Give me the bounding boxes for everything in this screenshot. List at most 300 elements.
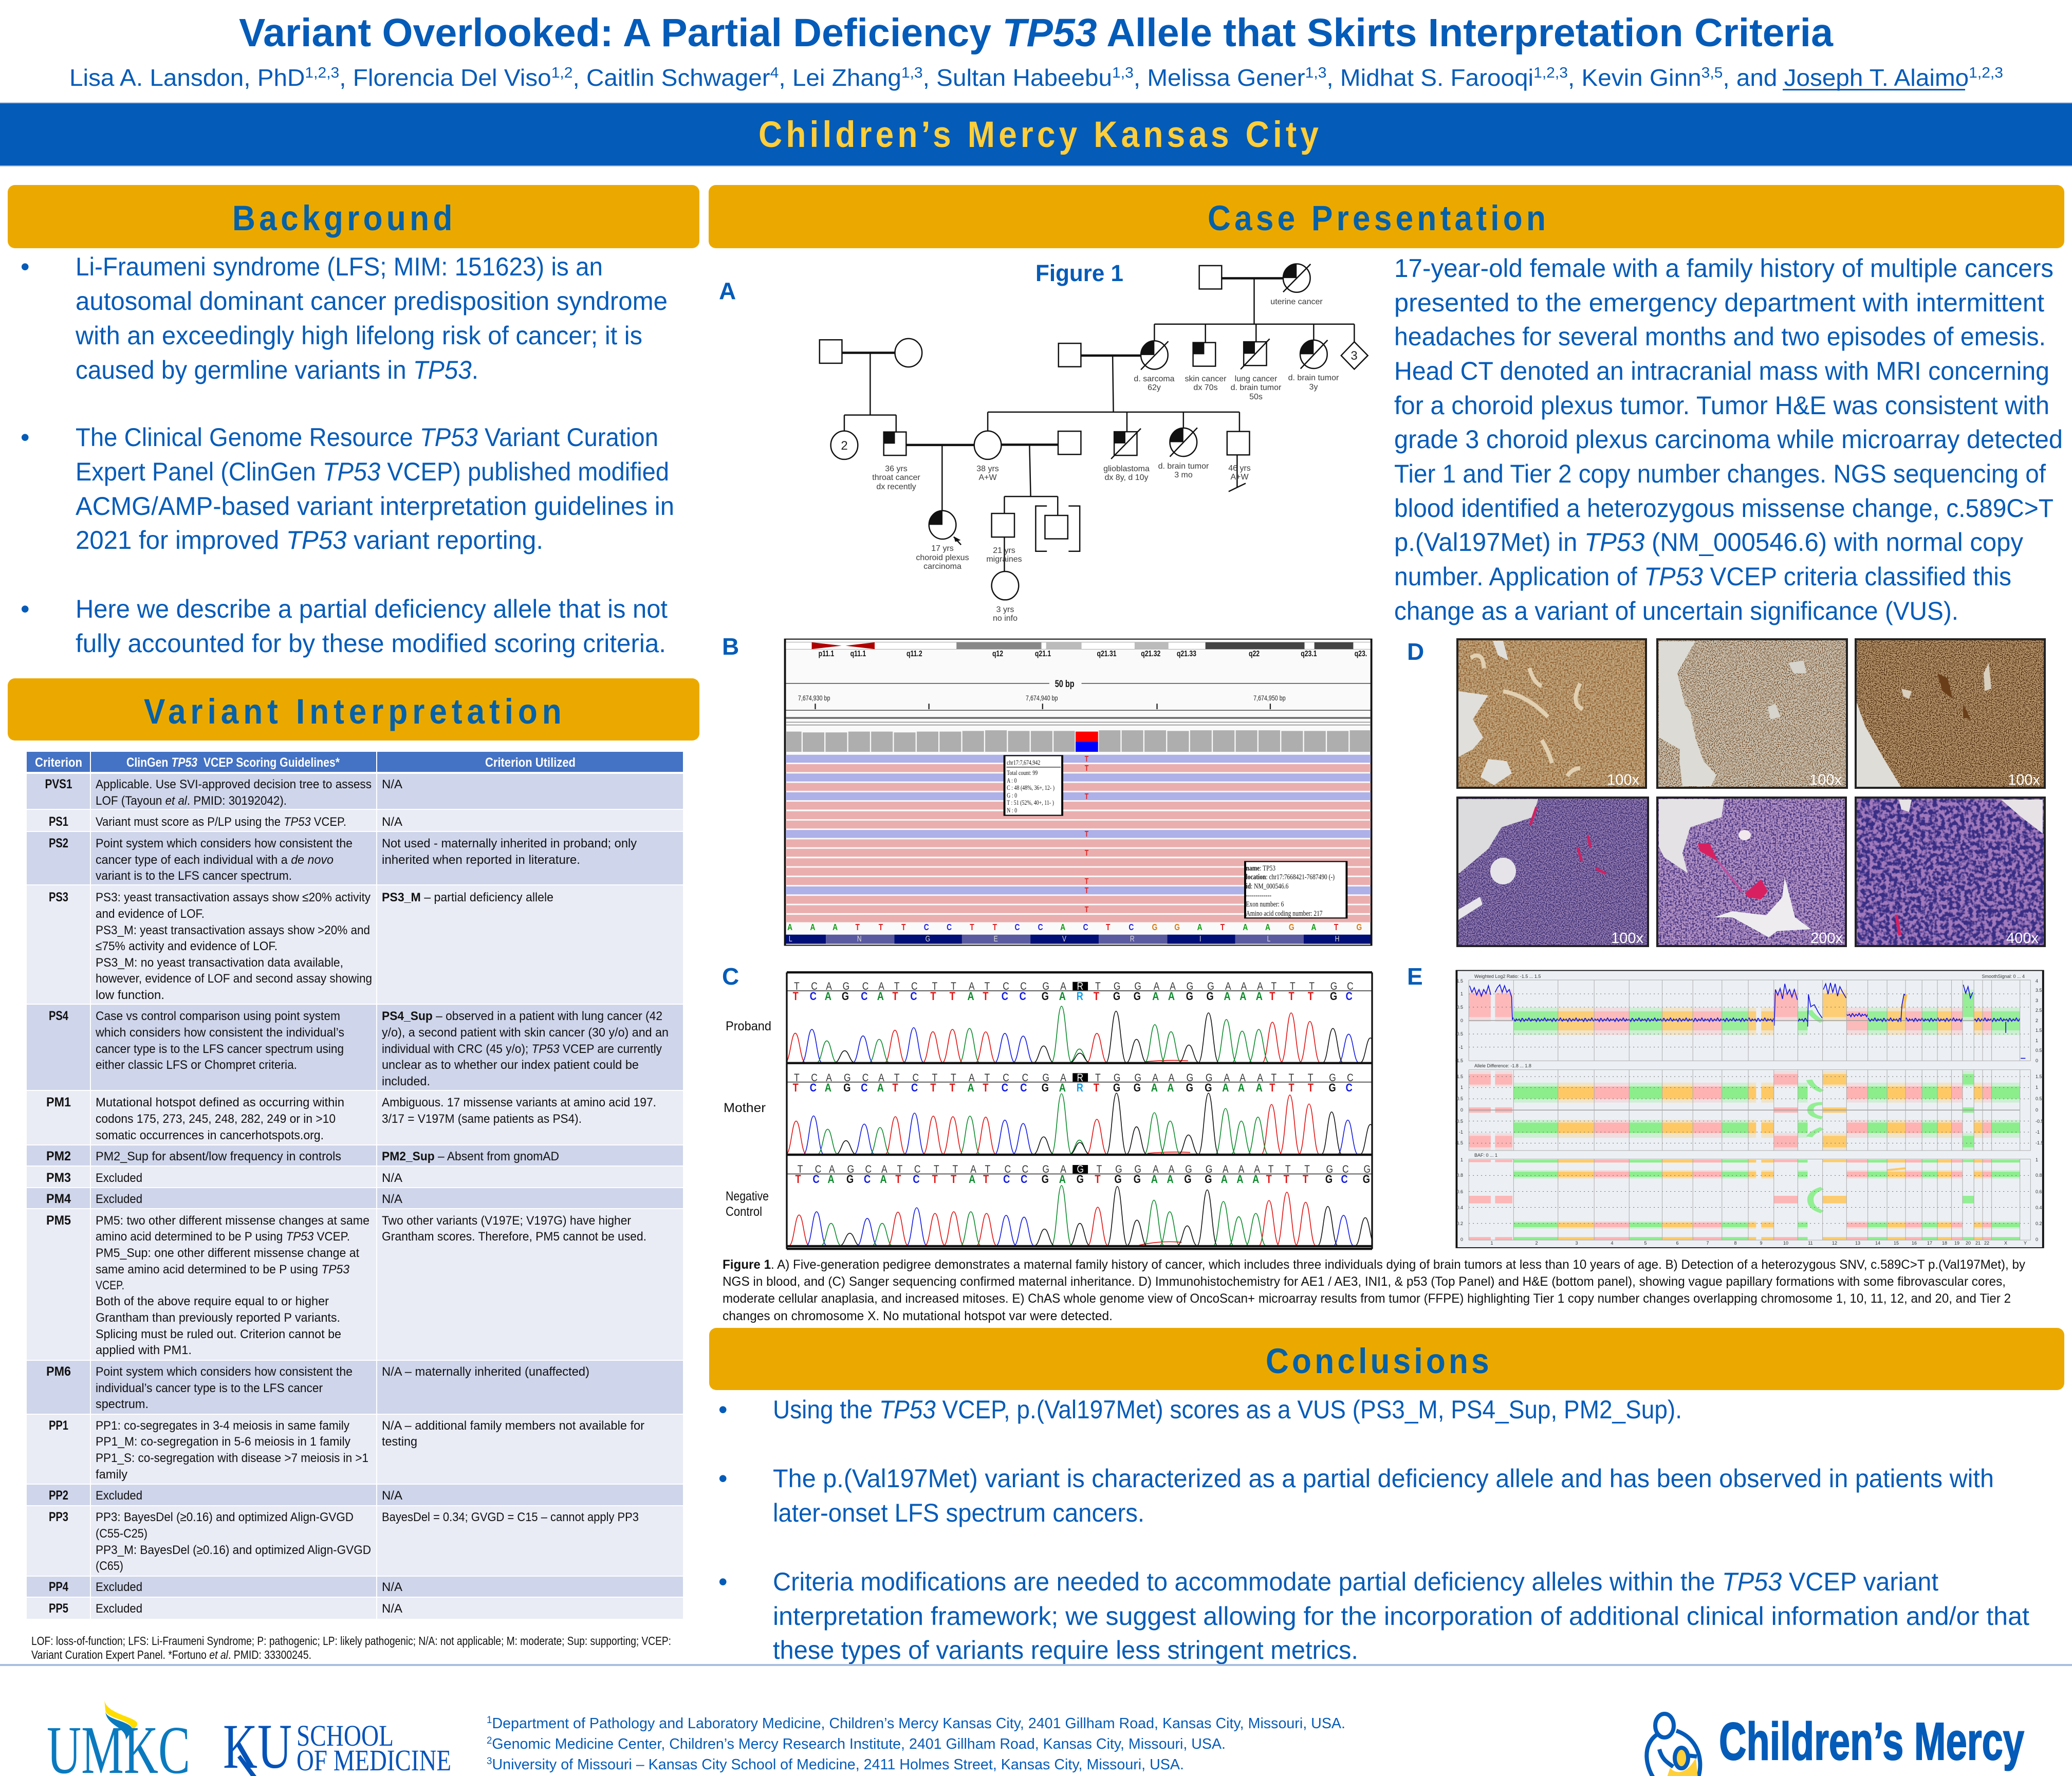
IGV labels: 7,674,930 bp <box>798 694 830 702</box>
microarray axis and track labels: 0.2 <box>2036 1221 2042 1226</box>
IGV labels: name: TP53 <box>1246 864 1275 872</box>
text block: background bullets: • <box>21 423 30 452</box>
row PP1 <box>49 1418 644 1482</box>
row PM2: PM2_Sup – Absent from gnomAD <box>382 1150 559 1163</box>
panel A: five-generation pedigree <box>820 264 1368 623</box>
chromatogram base calls: CCCCCC <box>813 1173 1348 1186</box>
micrograph: INI1 100x <box>1657 639 1847 788</box>
microarray axis and track labels: 1 <box>2036 1157 2038 1162</box>
table footnote: Variant Curation Expert Panel. *Fortuno et al. PMID: 33300245. <box>31 1648 311 1661</box>
pedigree labels: 38 yrs <box>976 465 999 473</box>
IGV labels: q21.32 <box>1141 650 1160 658</box>
pedigree labels: 3 mo <box>1174 471 1193 479</box>
IGV labels: T <box>1085 886 1089 895</box>
chromatogram base calls: TTTTTTTTT <box>793 990 1314 1003</box>
IGV labels: q11.1 <box>850 650 866 658</box>
microarray axis and track labels: 17 <box>1927 1241 1932 1246</box>
pedigree labels: d. sarcoma <box>1134 375 1175 383</box>
microarray axis and track labels: 0 <box>2036 1107 2038 1113</box>
microarray axis and track labels: -1.5 <box>1455 1140 1463 1145</box>
pedigree labels: 21 yrs <box>993 546 1015 555</box>
text block: background bullets: autosomal dominant cancer predisposition syndrome <box>76 287 668 316</box>
chromatogram sample labels <box>724 1019 771 1219</box>
microarray axis and track labels: SmoothSignal: 0 ... 4 <box>1982 974 2025 979</box>
row PS2: PS2 <box>49 836 68 850</box>
row PM5 <box>46 1213 646 1357</box>
text block: conclusions bullets: interpretation framework; we suggest allowing for the incorporation of additional clinical information and/or that <box>773 1602 2029 1631</box>
micrograph: AE1/AE3 100x: 100x <box>1607 772 1639 788</box>
row PP3: PP3_M: BayesDel (≥0.16) and optimized Align-GVGD <box>96 1543 371 1557</box>
row PM2 <box>46 1149 559 1163</box>
row PS3: PS3_M – partial deficiency allele <box>382 891 553 904</box>
microarray axis and track labels: -0.5 <box>1455 1119 1463 1124</box>
micrograph: H&E 100x: 100x <box>1611 930 1643 947</box>
microarray axis and track labels: 6 <box>1676 1241 1679 1246</box>
row PS4: Case vs control comparison using point system <box>96 1009 340 1023</box>
chromatogram base calls: GGGGGGG <box>843 1082 1336 1094</box>
pedigree labels: 62y <box>1148 383 1161 392</box>
heading: Case Presentation <box>709 185 2064 248</box>
figure caption: moderate cellular anaplasia, and increased mitoses. E) ChAS whole genome view of OncoScan+ microarray results from tumor (FFPE) highlighting Tier 1 copy number changes overlapping chromosome 1, 10, 11, 12, and 20, and Tier 2 <box>723 1291 2011 1306</box>
row PP1: N/A – additional family members not available for <box>382 1419 644 1433</box>
micrograph: p53 100x: 100x <box>2008 772 2040 788</box>
row PP3: BayesDel = 0.34; GVGD = C15 – cannot apply PP3 <box>382 1510 639 1524</box>
table header <box>27 752 683 772</box>
row PS4: unclear as to whether our index patient could be <box>382 1058 639 1072</box>
text block: case presentation: grade 3 choroid plexus carcinoma while microarray detected <box>1394 425 2063 454</box>
heading: Background <box>8 185 699 248</box>
microarray axis and track labels: 9 <box>1760 1241 1763 1246</box>
pedigree labels: throat cancer <box>872 473 920 482</box>
row PS1: N/A <box>382 815 403 829</box>
table: variant interpretation criteria <box>27 752 683 1619</box>
IGV shapes <box>785 639 1372 945</box>
micrograph: H&E 100x <box>1457 798 1648 947</box>
row PM5: same amino acid determined to be P using TP53 <box>96 1263 349 1276</box>
microarray axis and track labels: 0.5 <box>2036 1048 2042 1053</box>
authors: 4 <box>770 65 779 81</box>
row PS4: included. <box>382 1075 430 1088</box>
chromatogram sample labels: Mother <box>724 1101 766 1115</box>
row PP2: Excluded <box>96 1489 142 1503</box>
authors: , Caitlin Schwager <box>572 64 770 91</box>
IGV labels: L <box>789 935 792 943</box>
heading: Conclusions <box>709 1328 2064 1390</box>
text block: case presentation: change as a variant of uncertain significance (VUS). <box>1394 597 1958 625</box>
text block: conclusions bullets: Criteria modifications are needed to accommodate partial deficiency alleles within the TP53 VCEP variant <box>773 1567 1938 1596</box>
row PS2: cancer type of each individual with a de novo <box>96 853 334 867</box>
figure caption: changes on chromosome X. No mutational hotspot var were detected. <box>723 1309 1113 1323</box>
row PP1: PP1 <box>49 1418 68 1433</box>
microarray axis and track labels: 22 <box>1984 1241 1989 1246</box>
authors: 3,5 <box>1701 65 1723 81</box>
row PVS1: LOF (Tayoun et al. PMID: 30192042). <box>96 794 287 808</box>
microarray axis and track labels: -1 <box>2036 1130 2040 1135</box>
row PS2: Not used - maternally inherited in proband; only <box>382 837 637 850</box>
microarray axis and track labels: 21 <box>1975 1241 1981 1246</box>
text block: case presentation: Head CT denoted an intracranial mass with MRI concerning <box>1394 357 2049 385</box>
text block: conclusions bullets: Using the TP53 VCEP, p.(Val197Met) scores as a VUS (PS3_M, PS4_Sup, PM2_Sup). <box>773 1395 1682 1424</box>
microarray axis and track labels: 4 <box>2036 978 2038 984</box>
row PM1: codons 175, 273, 245, 248, 282, 249 or in >10 <box>96 1112 336 1126</box>
microarray axis and track labels: -0.5 <box>2036 1119 2044 1124</box>
chromatogram base calls: AAAAAAAAA <box>825 1082 1263 1094</box>
microarray axis and track labels: -1.5 <box>1455 1058 1463 1063</box>
heading: Background: Background <box>232 198 452 238</box>
text block: case presentation: 17-year-old female with a family history of multiple cancers <box>1394 254 2054 283</box>
row PS4: cancer type is to the LFS cancer spectrum using <box>96 1042 344 1056</box>
text block: case presentation: number. Application of TP53 VCEP criteria classified this <box>1394 562 2011 591</box>
title: Variant Overlooked: A Partial Deficiency TP53 Allele that Skirts Interpretation Criteria <box>239 11 1834 55</box>
IGV labels: R <box>1130 935 1135 943</box>
row PP5: Excluded <box>96 1602 142 1616</box>
row PP1: PP1_M: co-segregation in 5-6 meiosis in 1 family <box>96 1435 351 1449</box>
microarray axis and track labels: Y <box>2024 1241 2027 1246</box>
row PP1: PP1_S: co-segregation with disease >7 meiosis in >1 <box>96 1451 368 1465</box>
row PP4: N/A <box>382 1580 403 1594</box>
row PM1: Ambiguous. 17 missense variants at amino acid 197. <box>382 1096 656 1109</box>
text block: case presentation <box>1394 254 2063 625</box>
authors <box>69 64 2003 91</box>
pedigree labels: migraines <box>986 555 1022 564</box>
microarray axis and track labels: X <box>2004 1241 2007 1246</box>
microarray axis and track labels: -1 <box>1459 1130 1463 1135</box>
row fills <box>27 774 683 1619</box>
pedigree labels: dx 70s <box>1193 383 1218 392</box>
authors: , Sultan Habeebu <box>923 64 1112 91</box>
pedigree labels: choroid plexus <box>916 553 969 562</box>
IGV labels: q23. <box>1355 650 1367 658</box>
row PP1: family <box>96 1468 128 1482</box>
row PP3 <box>49 1510 639 1573</box>
text block: conclusions bullets: later-onset LFS spectrum cancers. <box>773 1498 1144 1527</box>
IGV labels: Total count: 99 <box>1007 769 1038 776</box>
chromatogram base calls: GGGGGGG <box>842 990 1337 1003</box>
IGV labels: 7,674,950 bp <box>1253 694 1286 702</box>
row PM4: PM4 <box>46 1192 71 1206</box>
microarray axis and track labels: 11 <box>1808 1241 1813 1246</box>
text block: background bullets: ACMG/AMP-based variant interpretation guidelines in <box>76 492 674 521</box>
authors: 1,2,3 <box>1969 65 2003 81</box>
authors: 1,2,3 <box>1533 65 1568 81</box>
IGV labels: T : 51 (52%, 40+, 11- ) <box>1007 799 1054 806</box>
row PP2: PP2 <box>49 1488 68 1503</box>
microarray plots <box>1456 970 2043 1248</box>
figure caption <box>723 1257 2025 1323</box>
figure title: Figure 1 <box>1035 260 1123 286</box>
row PM5: PM5_Sup: one other different missense change at <box>96 1246 359 1260</box>
panel label B: B <box>722 633 739 660</box>
microarray axis and track labels: 1.5 <box>2036 1074 2042 1079</box>
chromatogram base calls: CCCCCC <box>810 990 1353 1003</box>
micrograph: AE1/AE3 100x <box>1457 639 1646 788</box>
row PS3: and evidence of LOF. <box>96 907 205 921</box>
row PP5 <box>49 1601 403 1616</box>
row PS3: PS3_M: yeast transactivation assays show >20% and <box>96 923 370 937</box>
pedigree labels: d. brain tumor <box>1231 383 1282 392</box>
pedigree labels: 50s <box>1249 393 1263 401</box>
pedigree labels: uterine cancer <box>1270 298 1323 306</box>
IGV labels: I <box>1199 935 1201 943</box>
heading: Conclusions: Conclusions <box>1266 1341 1489 1381</box>
row PP1: PP1: co-segregates in 3-4 meiosis in same family <box>96 1419 350 1433</box>
text block: background bullets: • <box>21 252 30 281</box>
chromatogram traces <box>785 972 1381 1249</box>
microarray axis and track labels: 2 <box>1535 1241 1538 1246</box>
microarray axis and track labels: 0.8 <box>1456 1173 1463 1178</box>
microarray axis and track labels: 3.5 <box>2036 988 2042 993</box>
chromatogram base calls: AAAAAAAAA <box>825 990 1263 1003</box>
chromatogram base calls: TCAGCATCTTATCCGATGGAAGGAAATTTGC <box>794 1072 1354 1084</box>
pedigree labels: d. brain tumor <box>1288 374 1339 382</box>
panel D: immunohistochemistry and H&E micrographs <box>1457 639 2045 947</box>
row PM3 <box>46 1171 403 1185</box>
IGV labels: V <box>1062 935 1066 943</box>
icon: parent and child <box>1646 1714 1700 1776</box>
microarray axis and track labels: BAF: 0 ... 1 <box>1474 1153 1497 1158</box>
row PM3: N/A <box>382 1171 403 1185</box>
row PM3: PM3 <box>46 1171 71 1185</box>
row PP3: PP3: BayesDel (≥0.16) and optimized Align-GVGD <box>96 1510 354 1524</box>
microarray axis and track labels: 5 <box>1644 1241 1647 1246</box>
pedigree labels: dx recently <box>876 483 916 491</box>
microarray axis and track labels: 14 <box>1875 1241 1880 1246</box>
IGV labels: T <box>1085 830 1089 839</box>
pedigree labels: 3y <box>1309 383 1318 392</box>
row PM5: Splicing must be ruled out. Criterion cannot be <box>96 1327 341 1341</box>
row PS4 <box>49 1009 669 1088</box>
authors: 1,3 <box>901 65 923 81</box>
panel E: ChAS whole genome microarray view <box>1455 970 2044 1248</box>
row PS3: PS3_M: no yeast transactivation data available, <box>96 956 343 970</box>
text block: affiliations <box>487 1715 1345 1773</box>
row PVS1: PVS1 <box>45 777 72 791</box>
pedigree lines and symbols <box>820 264 1368 600</box>
chromatogram base calls: TTTTTTTTT <box>795 1173 1309 1186</box>
pedigree labels: A+W <box>1230 473 1249 482</box>
microarray axis and track labels: 2 <box>2036 1018 2038 1023</box>
row PM1 <box>46 1095 656 1142</box>
microarray axis and track labels: Allele Difference: -1.8 ... 1.8 <box>1474 1063 1531 1068</box>
table footnote: LOF: loss-of-function; LFS: Li-Fraumeni Syndrome; P: pathogenic; LP: likely pathogenic; N/A: not applicable; M: moderate; Sup: supporting; VCEP: <box>31 1634 671 1648</box>
pedigree labels: 2 <box>841 439 848 453</box>
row PP3: (C65) <box>96 1559 123 1573</box>
microarray axis and track labels: -0.5 <box>1455 1031 1463 1037</box>
IGV labels: q21.1 <box>1035 650 1051 658</box>
row PP2: N/A <box>382 1489 403 1503</box>
microarray axis and track labels: 1.5 <box>2036 1028 2042 1033</box>
microarray axis and track labels: 1 <box>1460 1085 1463 1090</box>
authors: , and Joseph T. Alaimo <box>1723 64 1969 91</box>
IGV labels: q23.1 <box>1301 650 1317 658</box>
row PM6: individual’s cancer type is to the LFS cancer <box>96 1381 323 1395</box>
chromatogram base calls: R <box>1077 990 1083 1003</box>
microarray axis and track labels: 2.5 <box>2036 1008 2042 1013</box>
row PM6: spectrum. <box>96 1397 149 1411</box>
authors: , Lei Zhang <box>779 64 901 91</box>
IGV labels: chr17:7,674,942 <box>1007 759 1041 766</box>
microarray axis and track labels: 0 <box>1460 1107 1463 1113</box>
row PS3: ≤75% activity and evidence of LOF. <box>96 939 278 953</box>
text block: affiliations: 2 <box>487 1735 492 1746</box>
row PM5: Grantham than previously reported P variants. <box>96 1311 340 1325</box>
row PS3: however, evidence of LOF and second assay showing <box>96 972 372 986</box>
row PS4: PS4 <box>49 1009 68 1023</box>
microarray axis and track labels: 0 <box>2036 1058 2038 1063</box>
row PS3: PS3: yeast transactivation assays show ≤20% activity <box>96 891 371 904</box>
IGV labels: Amino acid coding number: 217 <box>1246 909 1323 917</box>
row PM5: Grantham scores. Therefore, PM5 cannot be used. <box>382 1230 646 1244</box>
microarray axis and track labels: 8 <box>1734 1241 1737 1246</box>
pedigree labels: no info <box>993 614 1017 623</box>
row PVS1: N/A <box>382 778 403 791</box>
IGV labels: N : 0 <box>1007 807 1017 814</box>
table header: Criterion Utilized <box>485 755 576 770</box>
IGV labels: 7,674,940 bp <box>1026 694 1058 702</box>
IGV labels: q11.2 <box>906 650 922 658</box>
chromatogram base calls: R <box>1077 981 1083 992</box>
logo: KU School of Medicine: SCHOOL <box>297 1719 394 1752</box>
IGV labels: T <box>1085 755 1089 764</box>
microarray axis and track labels: 0.5 <box>2036 1096 2042 1101</box>
row PM2: PM2_Sup for absent/low frequency in controls <box>96 1150 341 1163</box>
text block: affiliations: Genomic Medicine Center, Children’s Mercy Research Institute, 2401 Gillham Road, Kansas City, Missouri, USA. <box>492 1736 1226 1752</box>
microarray axis and track labels: 20 <box>1966 1241 1971 1246</box>
IGV labels: GGGG <box>1152 922 1362 932</box>
pedigree labels: d. brain tumor <box>1158 462 1209 471</box>
row PVS1 <box>45 777 403 808</box>
microarray axis and track labels: 3 <box>2036 998 2038 1003</box>
row PS2: variant is to the LFS cancer spectrum. <box>96 869 292 883</box>
row PM5: Both of the above require equal to or higher <box>96 1294 329 1308</box>
row PS4: y/o), a second patient with skin cancer (30 y/o) and an <box>382 1026 669 1040</box>
panel label D: D <box>1407 638 1424 665</box>
logo: KU School of Medicine <box>223 1711 451 1776</box>
pedigree labels: 36 yrs <box>885 465 908 473</box>
pedigree labels: glioblastoma <box>1103 465 1150 473</box>
microarray axis and track labels: 1 <box>2036 1038 2038 1043</box>
chromatogram base calls: GGGGGGGGG <box>846 1173 1370 1186</box>
row PS1 <box>49 815 403 829</box>
chromatogram sample labels: Negative <box>726 1189 769 1204</box>
chromatogram sample labels: Control <box>726 1205 762 1219</box>
row PM1: somatic occurrences in cancerhotspots.org. <box>96 1128 324 1142</box>
text block: affiliations: Department of Pathology and Laboratory Medicine, Children’s Mercy Kansas City, 2401 Gillham Road, Kansas City, Missouri, USA. <box>492 1715 1345 1732</box>
pedigree labels: skin cancer <box>1185 375 1227 383</box>
row PP5: N/A <box>382 1602 403 1616</box>
row PM2: PM2 <box>46 1149 71 1163</box>
text block: background bullets <box>21 252 674 658</box>
text block: case presentation: headaches for several months and two episodes of emesis. <box>1394 322 2046 351</box>
heading: Variant Interpretation <box>8 678 699 741</box>
row PM4: N/A <box>382 1192 403 1206</box>
chromatogram base calls: TCAGCATCTTATCCGATGGAAGGAAATTTGCG <box>798 1164 1371 1175</box>
microarray axis and track labels: 1 <box>1490 1241 1493 1246</box>
text block: background bullets: 2021 for improved TP53 variant reporting. <box>76 526 543 554</box>
institution banner <box>0 102 2072 166</box>
panel label A: A <box>719 278 736 304</box>
logo: Children's Mercy <box>1646 1712 2024 1776</box>
text block: background bullets: Expert Panel (ClinGen TP53 VCEP) published modified <box>76 457 669 486</box>
microarray axis and track labels: -1 <box>1459 1045 1463 1050</box>
chromatogram base calls: G <box>1077 1164 1084 1175</box>
text block: background bullets: Li-Fraumeni syndrome (LFS; MIM: 151623) is an <box>76 252 603 281</box>
microarray axis and track labels: 0 <box>2036 1237 2038 1242</box>
text block: conclusions bullets: The p.(Val197Met) variant is characterized as a partial deficiency allele and has been observed in patients with <box>773 1464 1994 1493</box>
authors: , Florencia Del Viso <box>339 64 551 91</box>
microarray axis and track labels: 0.4 <box>2036 1205 2042 1210</box>
IGV labels: N <box>857 935 862 943</box>
IGV labels: G : 0 <box>1007 792 1017 799</box>
text block: affiliations: University of Missouri – Kansas City School of Medicine, 2411 Holmes Street, Kansas City, Missouri, USA. <box>492 1756 1184 1773</box>
row PM5: PM5: two other different missense changes at same <box>96 1214 369 1228</box>
microarray axis and track labels: 1 <box>2036 1085 2038 1090</box>
IGV labels: TTTTTTTT <box>856 922 1339 932</box>
text block: background bullets: fully accounted for by these modified scoring criteria. <box>76 629 666 658</box>
microarray axis and track labels: 0.6 <box>1456 1189 1463 1194</box>
IGV labels: E <box>994 935 998 943</box>
row PM5: applied with PM1. <box>96 1343 192 1357</box>
microarray axis and track labels: 0.5 <box>1456 1005 1463 1010</box>
row PS4: either classic LFS or Chompret criteria. <box>96 1058 297 1072</box>
pedigree labels: A+W <box>978 473 997 482</box>
text block: case presentation: presented to the emergency department with intermittent <box>1394 288 2044 317</box>
panel B: IGV read alignment view <box>785 639 1372 945</box>
microarray axis and track labels: 10 <box>1783 1241 1788 1246</box>
text block: background bullets: The Clinical Genome Resource TP53 Variant Curation <box>76 423 658 452</box>
microarray axis and track labels: 0.8 <box>2036 1173 2042 1178</box>
pedigree labels: carcinoma <box>923 562 961 571</box>
IGV labels: location: chr17:7668421-7687490 (-) <box>1246 873 1335 881</box>
row PM6: Point system which considers how consistent the <box>96 1365 353 1379</box>
table header: Criterion <box>35 755 82 770</box>
IGV labels: T <box>1085 849 1089 858</box>
authors: 1,2,3 <box>305 65 339 81</box>
chromatogram base calls <box>793 981 1371 1186</box>
row PP4: PP4 <box>49 1580 68 1594</box>
pedigree labels: 46 yrs <box>1228 464 1251 473</box>
chromatogram sample labels: Proband <box>726 1019 771 1033</box>
IGV labels: G <box>926 935 930 943</box>
row PM1: 3/17 = V197M (same patients as PS4). <box>382 1112 582 1126</box>
IGV labels: Exon number: 6 <box>1246 900 1284 908</box>
text block: case presentation: for a choroid plexus tumor. Tumor H&E was consistent with <box>1394 391 2049 420</box>
row PM5: VCEP. <box>96 1279 124 1292</box>
microarray axis and track labels: 1 <box>1460 1157 1463 1162</box>
row PP4: Excluded <box>96 1580 142 1594</box>
text block: conclusions bullets <box>718 1395 2029 1664</box>
IGV labels: 50 bp <box>1055 678 1075 689</box>
row PS4: which considers how consistent the individual’s <box>95 1026 344 1040</box>
text block: conclusions bullets: • <box>718 1567 728 1596</box>
row PM5: amino acid determined to be P using TP53 VCEP. <box>96 1230 350 1244</box>
panel label E: E <box>1407 963 1423 990</box>
IGV labels: id: NM_000546.6 <box>1246 882 1289 890</box>
text block: case presentation: p.(Val197Met) in TP53 (NM_000546.6) with normal copy <box>1394 528 2023 557</box>
microarray axis and track labels: 4 <box>1611 1241 1614 1246</box>
panel label C: C <box>722 963 739 990</box>
row PM4 <box>46 1192 403 1206</box>
pedigree labels: 3 <box>1350 349 1358 363</box>
IGV labels: C : 48 (48%, 36+, 12- ) <box>1007 784 1054 791</box>
row PP2 <box>49 1488 403 1503</box>
text block: affiliations: 1 <box>487 1715 492 1726</box>
table header: ClinGen TP53 VCEP Scoring Guidelines* <box>126 755 340 770</box>
chromatogram base calls: CCCCCC <box>810 1082 1353 1094</box>
row PS3: PS3 <box>49 890 68 904</box>
IGV labels: q21.31 <box>1097 650 1117 658</box>
row PS2: Point system which considers how consistent the <box>96 837 353 850</box>
